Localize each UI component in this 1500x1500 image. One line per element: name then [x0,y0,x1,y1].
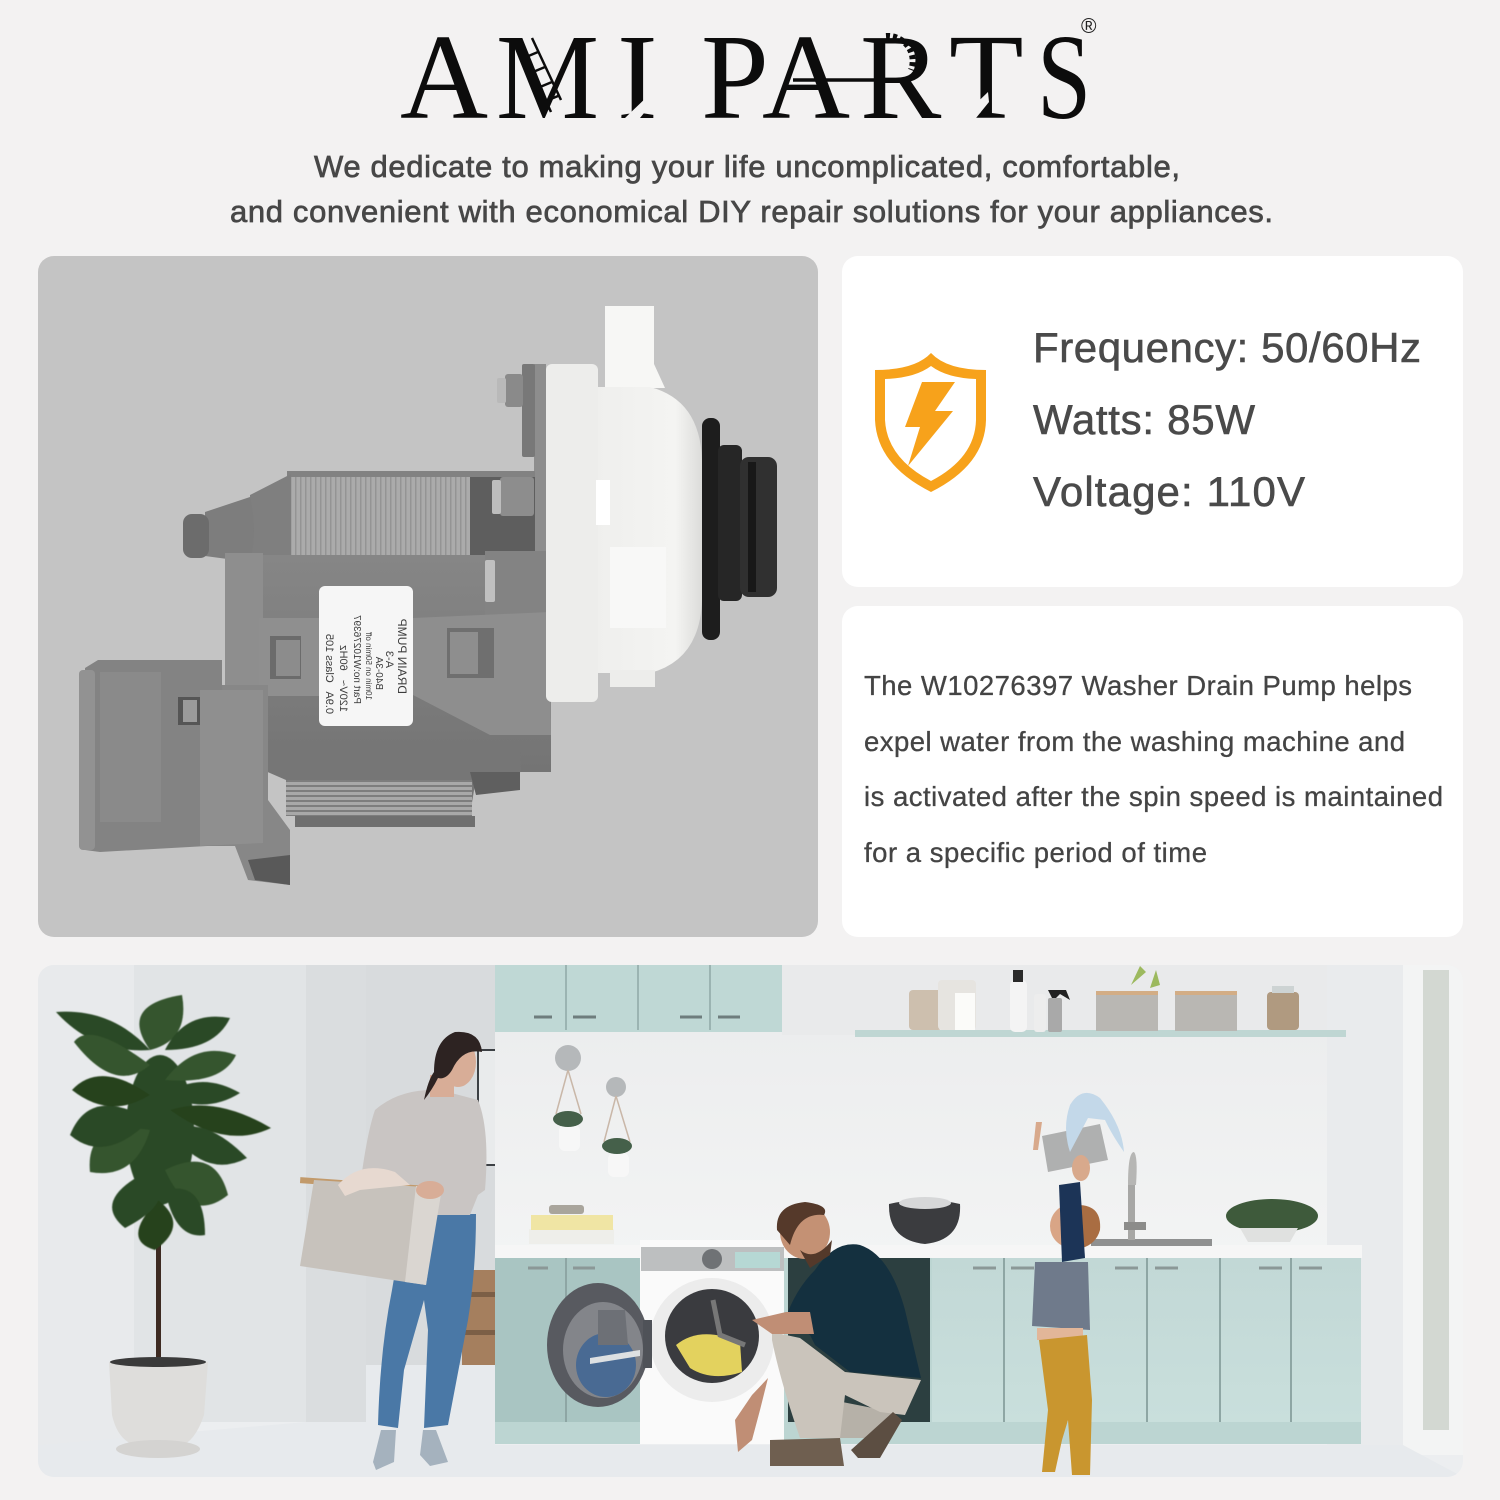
upper cabinets [495,965,782,1032]
logo: AMI PARTS: S [1037,10,1091,145]
man crouching at the washer [735,1202,921,1466]
specification list: Watts: 85W [1033,396,1255,443]
product label: A-3 [383,651,395,668]
base cabinets and counter [495,1239,1362,1444]
folded towels [529,1205,614,1244]
logo: AMI PARTS: T [949,10,1024,145]
tagline [230,149,1273,229]
specification list: Voltage: 110V [1033,468,1305,515]
washing machine [547,1240,784,1444]
description text: The W10276397 Washer Drain Pump helps [864,670,1412,701]
product label [319,586,413,726]
panel: product description [842,606,1463,937]
product label: B40-3A [373,656,384,690]
description text: expel water from the washing machine and [864,726,1405,757]
child lifting basket [1032,1093,1124,1475]
woman with laundry basket [300,1032,486,1470]
logo: AMI PARTS: R [860,10,942,145]
product label: 0.9A Class 105 [323,634,335,714]
panel: laundry room photo scene [38,965,1463,1477]
product label: 120V~ 60Hz [337,645,349,712]
hanging planters [553,1045,632,1154]
product label: Part no:W10276397 [351,615,362,704]
logo: AMI PARTS: A [762,10,850,145]
panel: electrical specifications [842,256,1463,587]
panel: pump product photo [38,256,818,937]
logo: AMI PARTS: P [701,10,769,145]
logo: AMI PARTS [400,9,1097,145]
shelf with jars, bottles and boxes [855,966,1346,1037]
logo: AMI PARTS: ® [1081,15,1097,38]
description text [864,670,1443,868]
logo: AMI PARTS: M [496,9,599,145]
counter bowl and potted greens [889,1152,1318,1244]
product label: DRAIN PUMP [395,619,409,694]
specification list: Frequency: 50/60Hz [1033,324,1421,371]
description text: is activated after the spin speed is maintained [864,781,1443,812]
tagline: We dedicate to making your life uncomplicated, comfortable, [314,149,1180,184]
fiddle leaf plant [56,995,271,1458]
tagline: and convenient with economical DIY repair solutions for your appliances. [230,194,1273,229]
room walls and floor [38,965,1463,1477]
product label: 10min on 50min off [364,631,373,700]
description text: for a specific period of time [864,837,1207,868]
icon: shield with lightning bolt [875,353,986,492]
logo: AMI PARTS: I [617,10,658,145]
pump illustration [79,306,777,885]
specification list [1033,324,1421,515]
logo: AMI PARTS: A [400,10,488,145]
